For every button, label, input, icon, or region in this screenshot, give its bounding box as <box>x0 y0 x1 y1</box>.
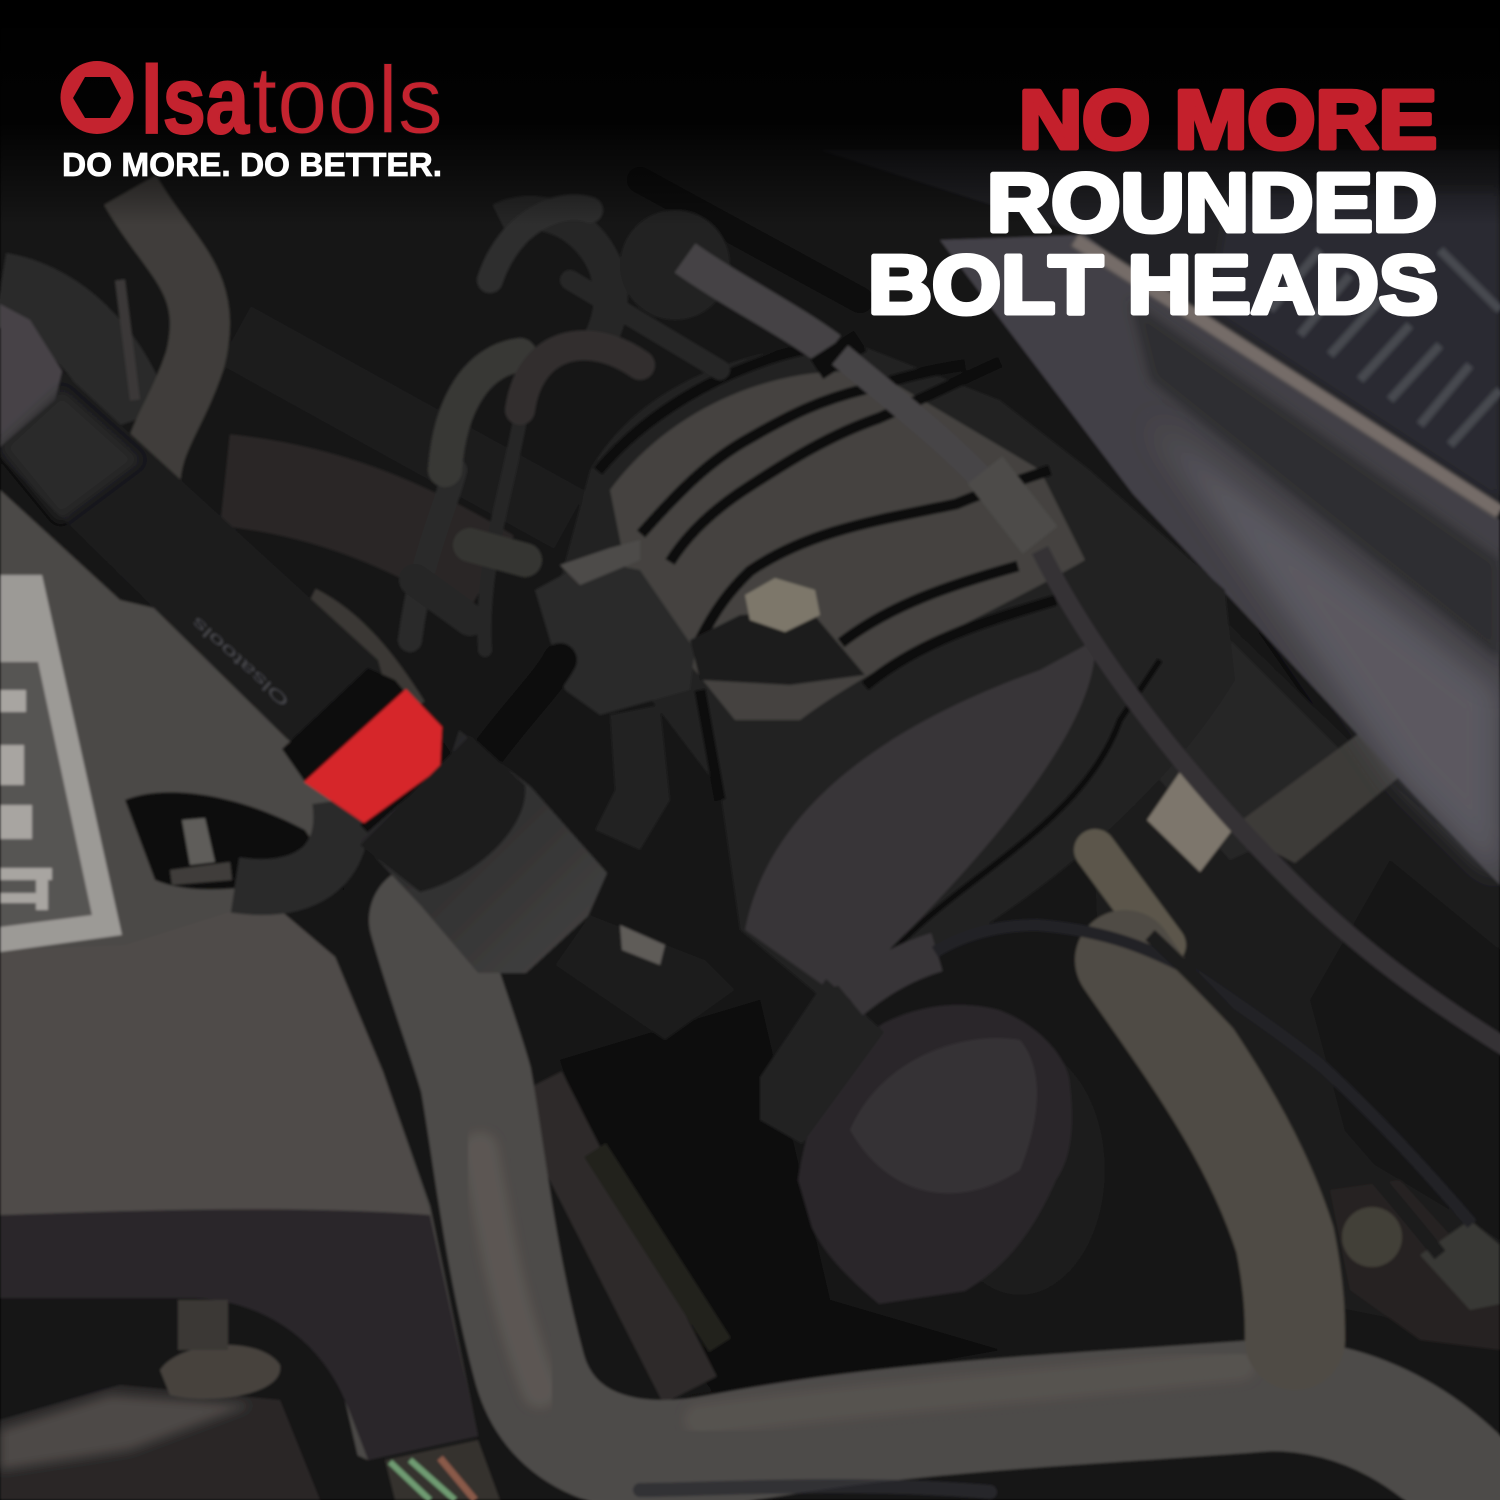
logo letter O with hexagon <box>60 61 133 134</box>
bottom left dark engine parts <box>0 1298 500 1500</box>
long grey cable <box>685 258 1500 1050</box>
lower right fittings <box>1330 1180 1500 1350</box>
manifold ridges <box>598 345 1056 800</box>
socket extension bar: Olsatools <box>188 613 293 710</box>
engine cover <box>0 490 478 1460</box>
headline <box>868 73 1438 331</box>
logo wordmark bold: lsa <box>141 47 249 154</box>
lower right beige hose <box>1125 960 1295 1340</box>
bell housing and connector <box>760 952 1072 1304</box>
engine cover badge <box>0 575 122 952</box>
intake manifold <box>560 345 1235 1005</box>
headline line: rounded: ROUNDED <box>987 156 1437 249</box>
socket extension bar <box>0 304 395 775</box>
thin beige hose <box>1095 850 1165 945</box>
red ring <box>304 689 442 823</box>
sensor with bracket and bolt <box>535 540 865 850</box>
impact socket <box>359 730 607 973</box>
logo wordmark regular: tools <box>252 47 443 154</box>
right side dark body <box>1080 480 1500 1340</box>
logo tagline: DO MORE. DO BETTER. <box>62 146 442 183</box>
logo <box>60 47 443 183</box>
headline line: no more: NO MORE <box>1019 73 1437 166</box>
dark secondary hoses <box>535 1085 720 1390</box>
black bay gaps <box>560 1000 1000 1400</box>
black wires <box>935 925 1472 1255</box>
small black hoses <box>410 180 860 750</box>
upper left hoses <box>0 190 611 720</box>
top dark fade <box>0 0 1500 225</box>
rear disc behind bell <box>935 1045 1105 1295</box>
knurled collar <box>282 668 465 850</box>
lower socket extension <box>555 915 735 1040</box>
grey diagonal panel upper right <box>820 150 1500 885</box>
headline line: bolt heads: BOLT HEADS <box>868 238 1438 331</box>
main grey coolant hose <box>425 920 1500 1500</box>
cover cutout with hose <box>125 792 345 890</box>
